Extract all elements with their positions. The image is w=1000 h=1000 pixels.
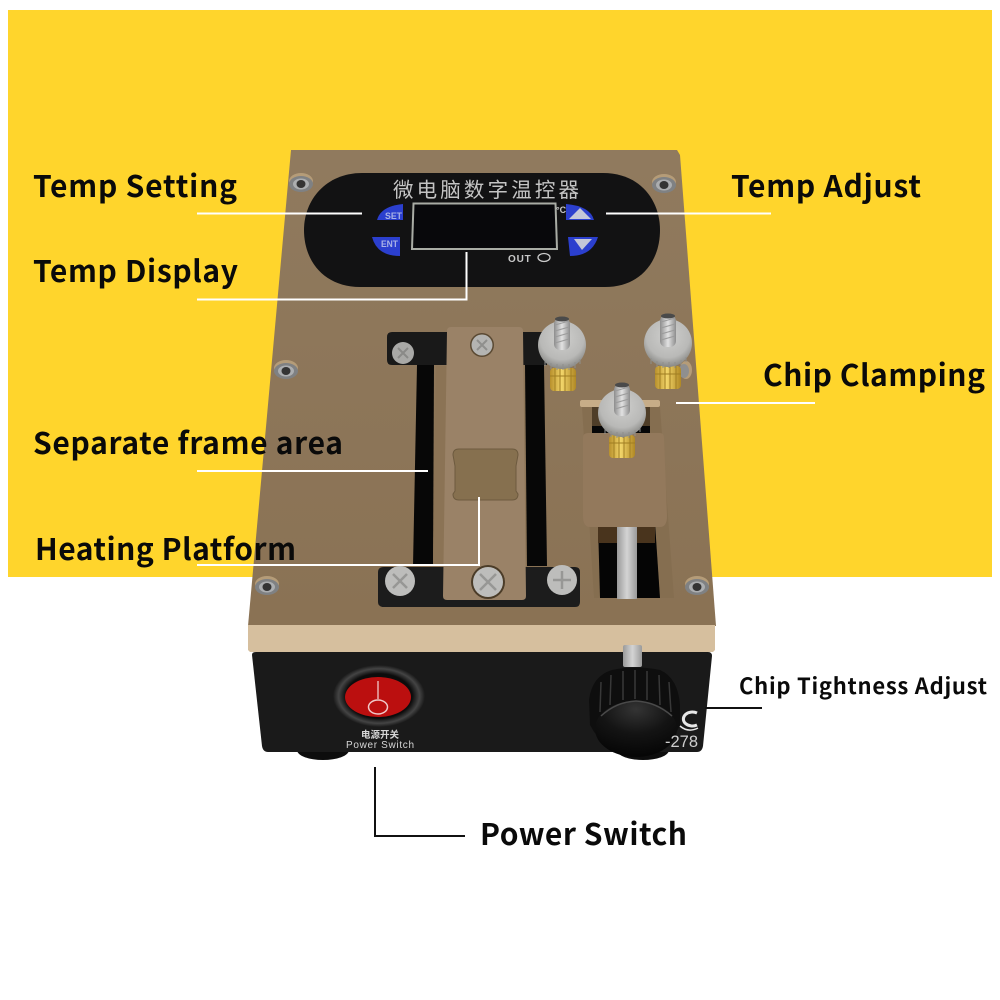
power switch: Power Switch [346,740,414,751]
label: Heating Platform [35,525,296,569]
rubber feet [297,740,669,760]
rail screws [385,333,577,599]
SET button [377,204,403,222]
brand mark and model [665,712,698,751]
corner screws [255,173,709,595]
red rocker [345,677,411,717]
OUT indicator: OUT [508,254,532,265]
left rail [413,365,434,566]
heating platform window [453,449,518,500]
callout: power switch [375,767,687,854]
top bracket [387,332,547,365]
leader [197,212,362,214]
track [598,523,660,598]
leader [676,402,815,404]
label: Temp Display [33,247,238,291]
chip clamp assembly [580,400,674,599]
leader [705,707,762,709]
label: Temp Setting [33,162,237,206]
knob cap [595,701,677,757]
leader [197,470,428,472]
bottom bracket [378,567,580,607]
down button [568,237,598,256]
leader [197,497,479,565]
leader [606,212,771,214]
right rail [525,365,547,566]
label: Temp Adjust [731,162,921,206]
sliding block [583,433,667,527]
switch symbols [377,681,379,699]
switch caption: 电源开关 [361,729,399,741]
label: Separate frame area [33,419,343,463]
ENT button [372,237,400,256]
panel title: 微电脑数字温控器 [393,179,579,202]
control panel [304,173,660,287]
callout: heating platform [35,497,479,569]
clamp slot [592,407,650,433]
yellow background panel [8,10,992,577]
leader [375,767,465,836]
ENT button: ENT [381,239,398,250]
panel body [304,173,660,287]
threaded rod [617,525,637,599]
label: Chip Clamping [763,351,985,395]
separate frame rails [378,332,580,607]
device illustration [248,150,716,760]
inner track [433,366,447,564]
center strip [443,327,526,600]
front black housing [252,652,712,752]
temperature display [412,204,557,249]
up button [566,204,594,220]
thumb screws [538,314,692,458]
knob grip [589,668,680,757]
tightness knob [589,645,680,757]
label: Power Switch [480,810,687,854]
callout: temp display [33,247,466,300]
knob highlight [601,701,672,716]
front edge of plate [248,625,715,652]
leader [197,252,466,300]
SET button: SET [385,211,402,222]
knob stud [623,645,642,667]
label: Chip Tightness Adjust [739,669,987,701]
degree mark: °C [556,205,567,215]
power switch [333,665,425,751]
clamp frame [580,400,674,598]
OUT indicator [508,254,550,265]
brand mark and model: -278 [665,732,698,751]
top plate [248,150,716,626]
switch bezel [333,665,425,727]
